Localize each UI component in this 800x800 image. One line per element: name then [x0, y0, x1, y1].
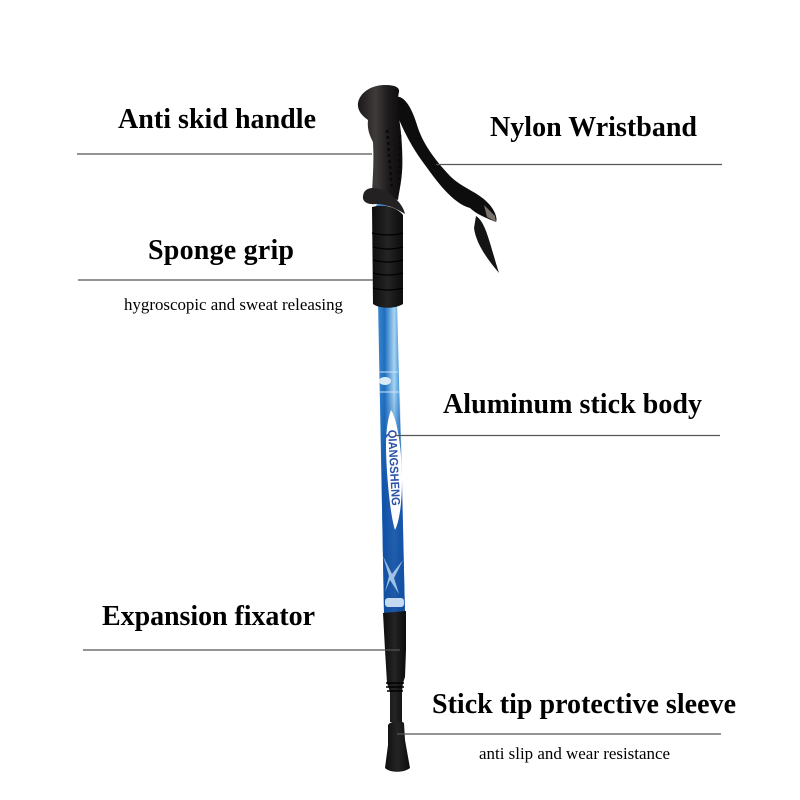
shaft small logo	[379, 372, 399, 392]
leader line: stick tip	[397, 733, 721, 735]
aluminum shaft	[378, 300, 405, 614]
nylon wristband	[396, 97, 499, 273]
heading: aluminum stick body: Aluminum stick body	[443, 389, 702, 420]
white brand oval: QIANGSHENG	[385, 429, 403, 506]
trekking pole	[358, 85, 499, 772]
leader line: anti skid handle	[77, 153, 372, 155]
heading: sponge grip: Sponge grip	[148, 235, 294, 266]
anti skid handle	[358, 85, 405, 214]
heading: expansion fixator: Expansion fixator	[102, 601, 315, 632]
expansion fixator	[383, 611, 406, 722]
heading: nylon wristband: Nylon Wristband	[490, 112, 697, 143]
leader line: aluminum body	[396, 434, 720, 436]
blue peek under flange	[376, 203, 388, 209]
white brand oval	[385, 410, 403, 530]
leader line: sponge grip	[78, 279, 373, 281]
shaft darker lower tone	[380, 390, 405, 614]
heading: stick tip protective sleeve: Stick tip protective sleeve	[432, 689, 736, 720]
sponge grip	[372, 206, 403, 308]
handle flange	[363, 188, 405, 214]
heading: anti skid handle: Anti skid handle	[118, 104, 316, 135]
leader line: nylon wristband	[436, 164, 722, 166]
note: anti slip: anti slip and wear resistance	[479, 744, 670, 763]
note: hygroscopic: hygroscopic and sweat releasing	[124, 295, 343, 314]
stick tip protective sleeve	[385, 721, 410, 772]
star graphic on shaft	[383, 556, 403, 594]
handle ridges	[387, 130, 400, 190]
lower logo band	[385, 598, 404, 607]
leader line: expansion fixator	[83, 649, 400, 651]
